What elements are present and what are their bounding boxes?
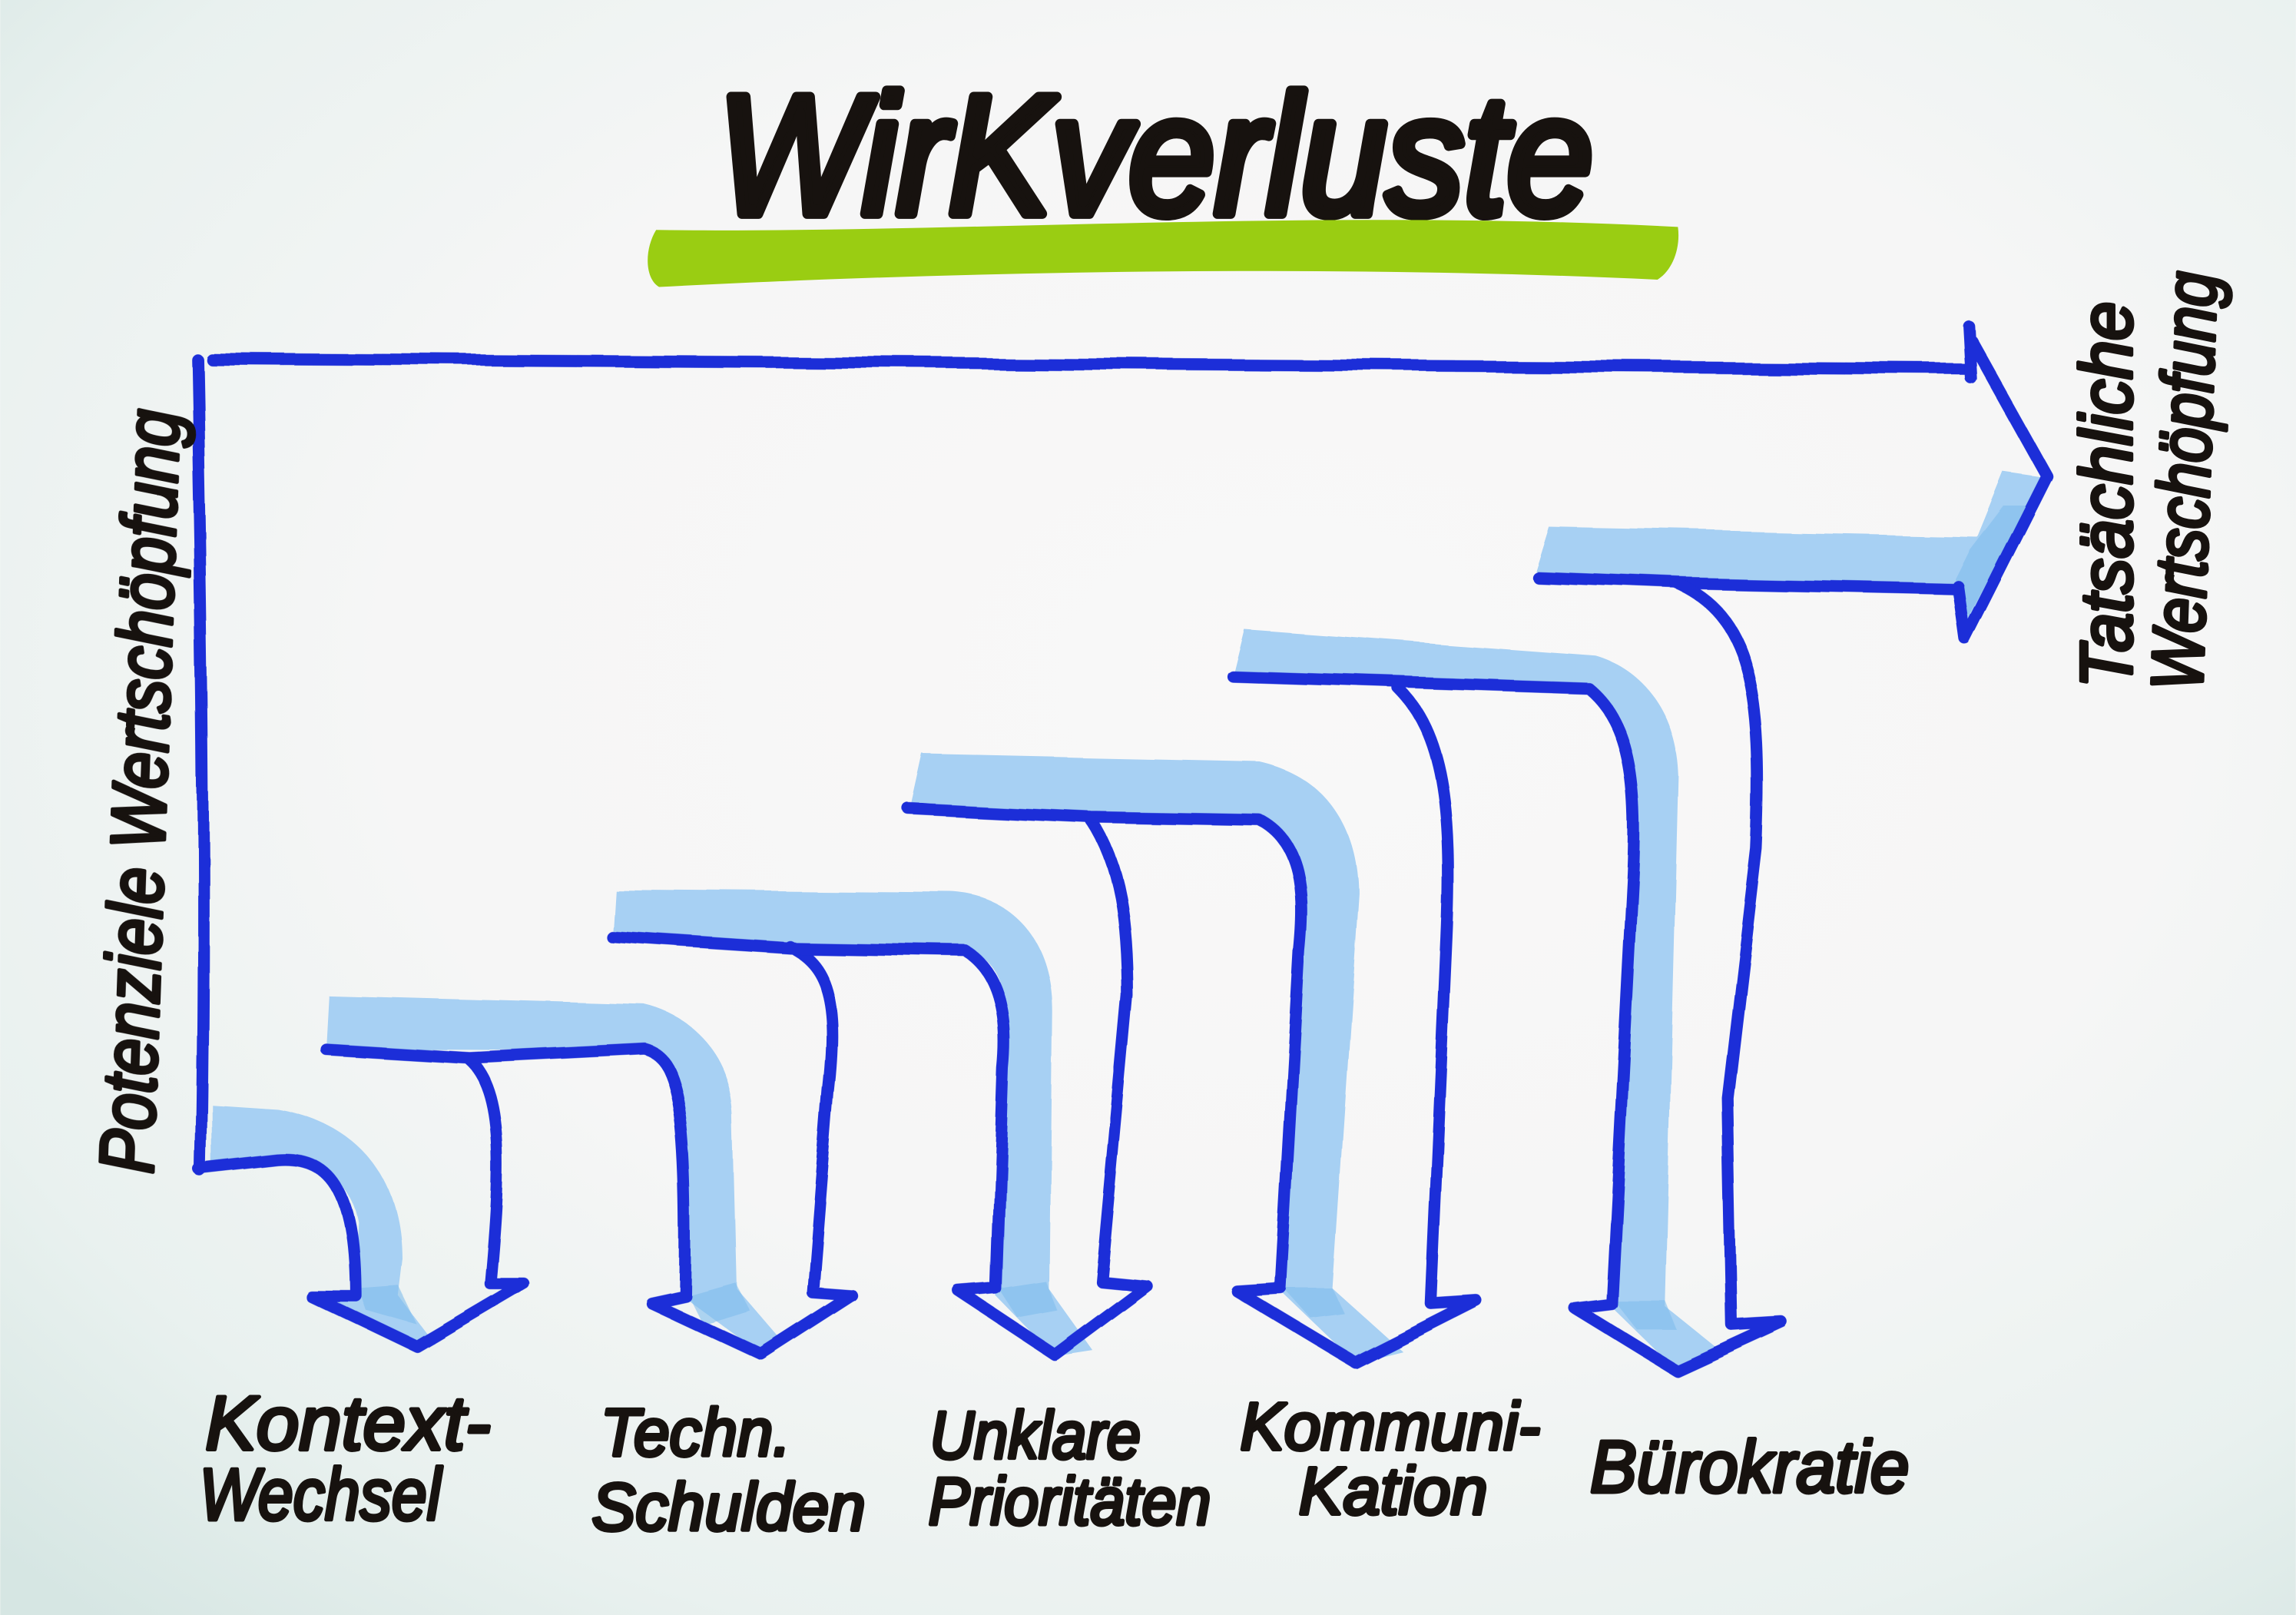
overlap: arrow 1 xyxy=(359,1285,418,1325)
top horizontal line xyxy=(211,359,1970,369)
bottom actual value line xyxy=(1537,577,1955,589)
overlap: arrow 3 xyxy=(999,1281,1057,1318)
label: Kommunikation xyxy=(1241,1389,1540,1529)
line: Wertschoepfung: Wertschöpfung xyxy=(2137,270,2233,691)
fill: Unklare Prioritaeten xyxy=(612,890,1092,1356)
line 1: Unklare xyxy=(930,1398,1141,1473)
line 2: Schulden xyxy=(591,1469,866,1544)
fill: Techn. Schulden xyxy=(325,996,785,1355)
fill: final stub into main arrow xyxy=(1535,472,2044,632)
label: Potenzielle Wertschoepfung: Potenziele Wertschöpfung xyxy=(84,408,195,1175)
green title underline xyxy=(648,220,1678,287)
overlap: arrow 2 xyxy=(688,1282,750,1325)
label: Tatsaechliche Wertschoepfung xyxy=(2066,270,2233,691)
main potential value arrow outline xyxy=(197,325,2047,1172)
label: Techn. Schulden xyxy=(591,1394,866,1544)
outline: Kommunikation arrow xyxy=(908,688,1476,1361)
outline: Buerokratie arrow xyxy=(1233,582,1782,1371)
outline: Unklare Prioritaeten arrow xyxy=(612,820,1147,1355)
label: Kontext-Wechsel xyxy=(200,1381,491,1536)
line 1: Kontext- xyxy=(205,1381,491,1466)
fill: Buerokratie xyxy=(1233,629,1724,1371)
overlap: arrow 4 xyxy=(1284,1288,1344,1318)
loss arrow outlines xyxy=(200,582,1782,1371)
fill: Kontext-Wechsel xyxy=(213,1106,435,1347)
overlap: final arrow xyxy=(1955,505,2028,622)
line 1: Kommuni- xyxy=(1241,1389,1540,1464)
line: Tatsaechliche: Tatsächliche xyxy=(2066,302,2148,688)
line 2: Wechsel xyxy=(200,1454,442,1536)
title text: WirKverluste xyxy=(717,60,1593,250)
line 2: Kation xyxy=(1299,1454,1488,1529)
line 2: Prioritäten xyxy=(929,1464,1211,1539)
darker overlap at arrowheads xyxy=(359,505,2028,1329)
outline: Kontext-Wechsel arrow xyxy=(200,1059,525,1347)
loss arrow fills xyxy=(213,472,2044,1371)
line 1: Techn. xyxy=(601,1394,791,1470)
outline: Techn. Schulden arrow xyxy=(325,947,853,1355)
overlap: arrow 5 xyxy=(1614,1300,1676,1329)
arrow head xyxy=(1957,325,2047,638)
fill: Kommunikation xyxy=(911,754,1401,1361)
label: Buerokratie: Bürokratie xyxy=(1590,1427,1909,1508)
left vertical line xyxy=(197,359,204,1172)
label: Unklare Prioritaeten xyxy=(929,1398,1211,1539)
